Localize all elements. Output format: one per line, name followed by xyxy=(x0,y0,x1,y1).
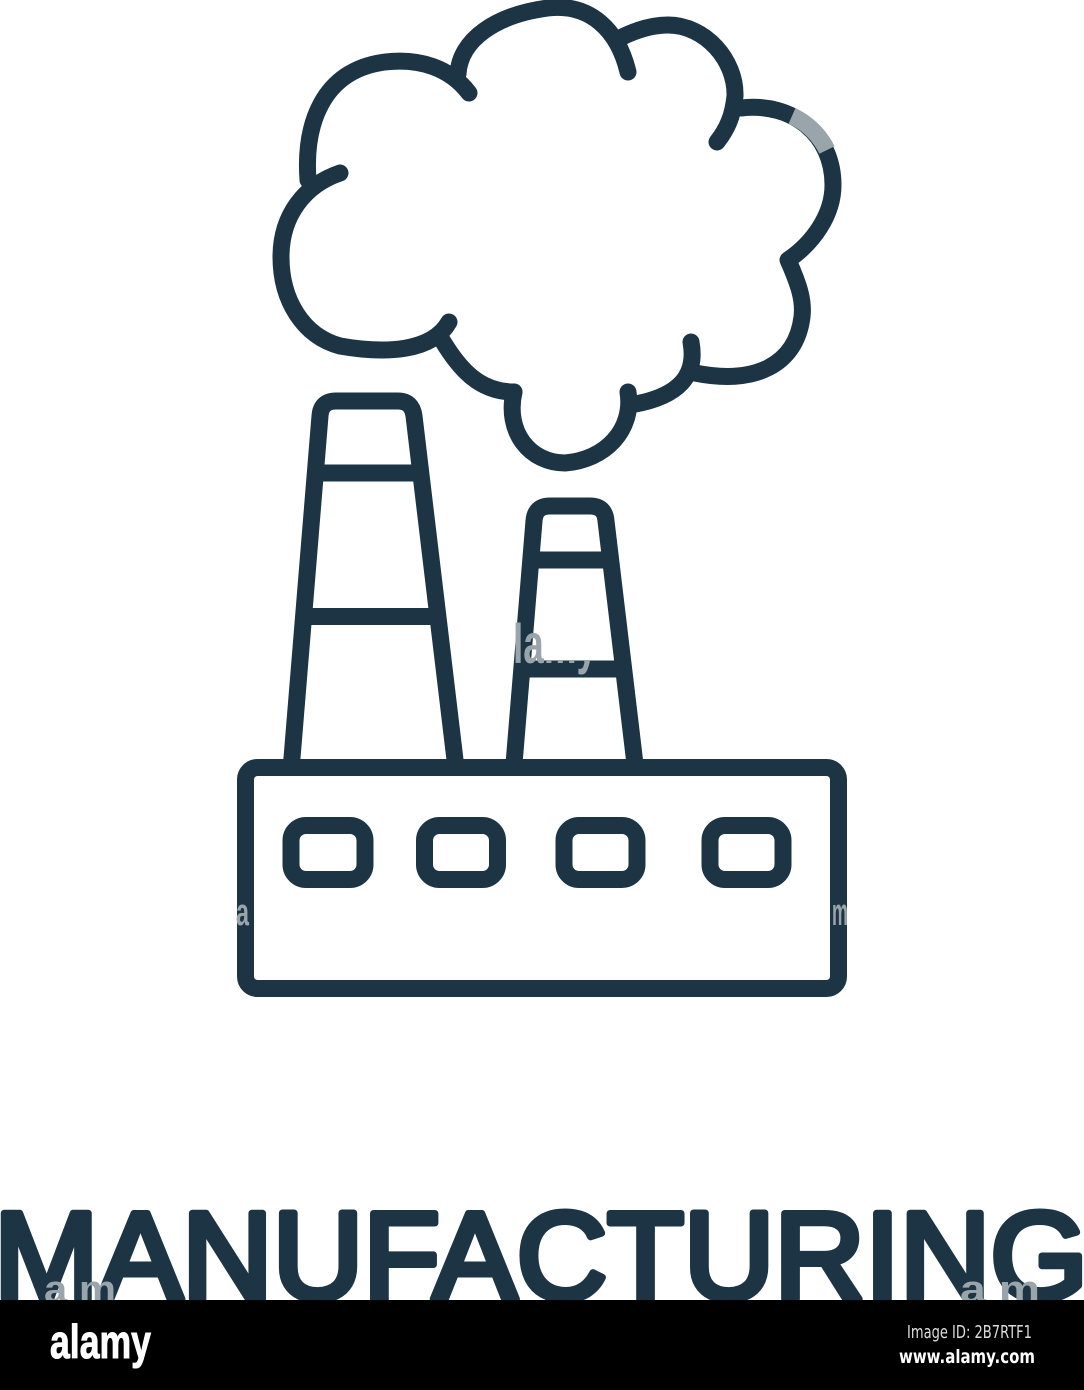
footer bar xyxy=(0,1300,1084,1390)
icon: factory window 2 xyxy=(424,826,498,880)
watermark fragments: a m xyxy=(960,1269,1040,1311)
watermark fragments: a m xyxy=(44,1269,116,1311)
icon: tall chimney xyxy=(292,401,456,764)
website: www.alamy.com xyxy=(899,1346,1035,1368)
watermark fragments: m xyxy=(832,892,848,934)
icon: factory window 4 xyxy=(710,826,783,880)
icon: factory window 1 xyxy=(291,826,365,880)
watermark fragments: a xyxy=(236,892,250,934)
icon: factory window 3 xyxy=(564,826,637,880)
icon: factory building xyxy=(246,768,838,988)
icon: short chimney xyxy=(514,506,635,764)
brand logo: alamy xyxy=(50,1315,151,1368)
icon: smoke cloud xyxy=(281,7,833,463)
image id: Image ID: 2B7RTF1 xyxy=(907,1322,1032,1343)
watermark fragments: lamy xyxy=(513,612,597,675)
watermark fragments xyxy=(44,116,1040,1311)
title: MANUFACTURING xyxy=(0,1188,1084,1326)
